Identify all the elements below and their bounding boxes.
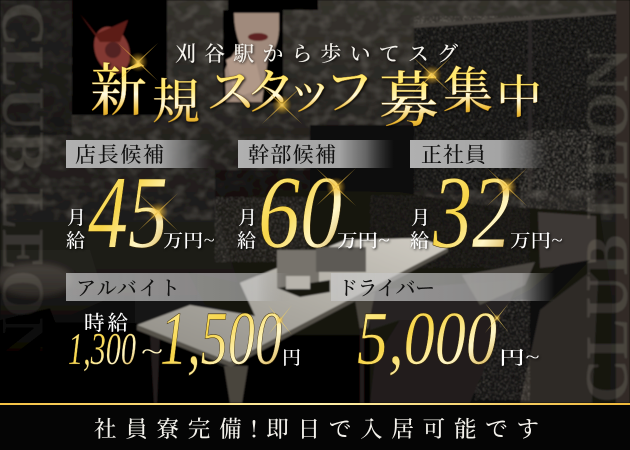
right sofa [505, 272, 598, 403]
position tag: ドライバー: ドライバー [338, 272, 435, 301]
dark back wall behind sofas [310, 125, 414, 205]
right wall band [616, 0, 630, 403]
hat top [228, 0, 318, 10]
dark bottom-left vignette [0, 270, 135, 403]
salary: 店長候補 月給45万円~: 給 [66, 226, 85, 253]
main heading: 中 [496, 61, 542, 127]
dark glass triangle [188, 272, 255, 316]
white table [137, 238, 448, 362]
salary: 幹部候補 月給60万円~: 月 [238, 203, 257, 230]
salary: 正社員 月給32万円~: 万円~ [510, 227, 563, 253]
position tag: 正社員: 正社員 [421, 139, 486, 169]
salary: 店長候補 月給45万円~ [66, 155, 215, 270]
rose painting [72, 0, 167, 115]
position tag: 幹部候補 [238, 139, 394, 169]
salary: 幹部候補 月給60万円~: 60 [258, 155, 342, 270]
subtitle: 刈谷駅から歩いてスグ [175, 38, 458, 68]
main heading: 募 [379, 53, 439, 139]
salary: ドライバー 5,000円~: 5,000 [357, 297, 497, 381]
floor [0, 322, 320, 403]
salary: 店長候補 月給45万円~: 万円~ [163, 227, 215, 253]
salary: 正社員 月給32万円~: 月 [411, 203, 430, 230]
back sofa [215, 190, 612, 403]
main heading: 集 [443, 51, 493, 123]
woman portrait painting [223, 10, 283, 103]
main heading [90, 45, 542, 139]
bottom banner: 社員寮完備!即日で入居可能です [94, 412, 539, 444]
salary: ドライバー 5,000円~: 円~ [499, 343, 540, 370]
centre seat cushion [370, 312, 500, 403]
main heading: スタッフ [206, 52, 374, 124]
left sofa [0, 250, 105, 322]
salary: 店長候補 月給45万円~: 45 [88, 155, 168, 270]
table legs [224, 366, 248, 403]
salary: アルバイト 時給1,300~1,500円: 1,300 [68, 324, 136, 374]
wall shadow: left column [0, 0, 72, 135]
salary: 幹部候補 月給60万円~ [237, 155, 390, 270]
position tag: 店長候補: 店長候補 [75, 139, 164, 169]
salary: アルバイト 時給1,300~1,500円: ~ [140, 331, 164, 371]
speckled curtain right [520, 130, 595, 215]
position tag: ドライバー [331, 272, 555, 301]
bottom banner [0, 403, 630, 450]
position tag: 幹部候補: 幹部候補 [248, 139, 336, 169]
salary: 正社員 月給32万円~: 給 [410, 226, 429, 253]
position tag: アルバイト [66, 272, 290, 301]
salary: 幹部候補 月給60万円~: 万円~ [337, 227, 390, 253]
position tag: 正社員 [410, 139, 548, 169]
salary: 店長候補 月給45万円~: 月 [67, 203, 86, 230]
position tag: 店長候補 [66, 139, 212, 169]
table items [277, 247, 366, 297]
salary: 幹部候補 月給60万円~: 給 [237, 226, 256, 253]
position tag: アルバイト: アルバイト [76, 272, 180, 301]
salary: アルバイト 時給1,300~1,500円: 時給 [84, 306, 128, 336]
salary: アルバイト 時給1,300~1,500円: 1,500 [160, 297, 282, 381]
dark window panel [414, 11, 616, 190]
main heading: 規 [152, 63, 200, 132]
salary: 正社員 月給32万円~: 32 [432, 155, 511, 270]
salary: アルバイト 時給1,300~1,500円 [68, 297, 301, 381]
main heading: 新 [90, 45, 147, 127]
salary: アルバイト 時給1,300~1,500円: 円 [282, 343, 301, 370]
sparkles [118, 43, 527, 335]
salary: 正社員 月給32万円~ [410, 155, 563, 270]
